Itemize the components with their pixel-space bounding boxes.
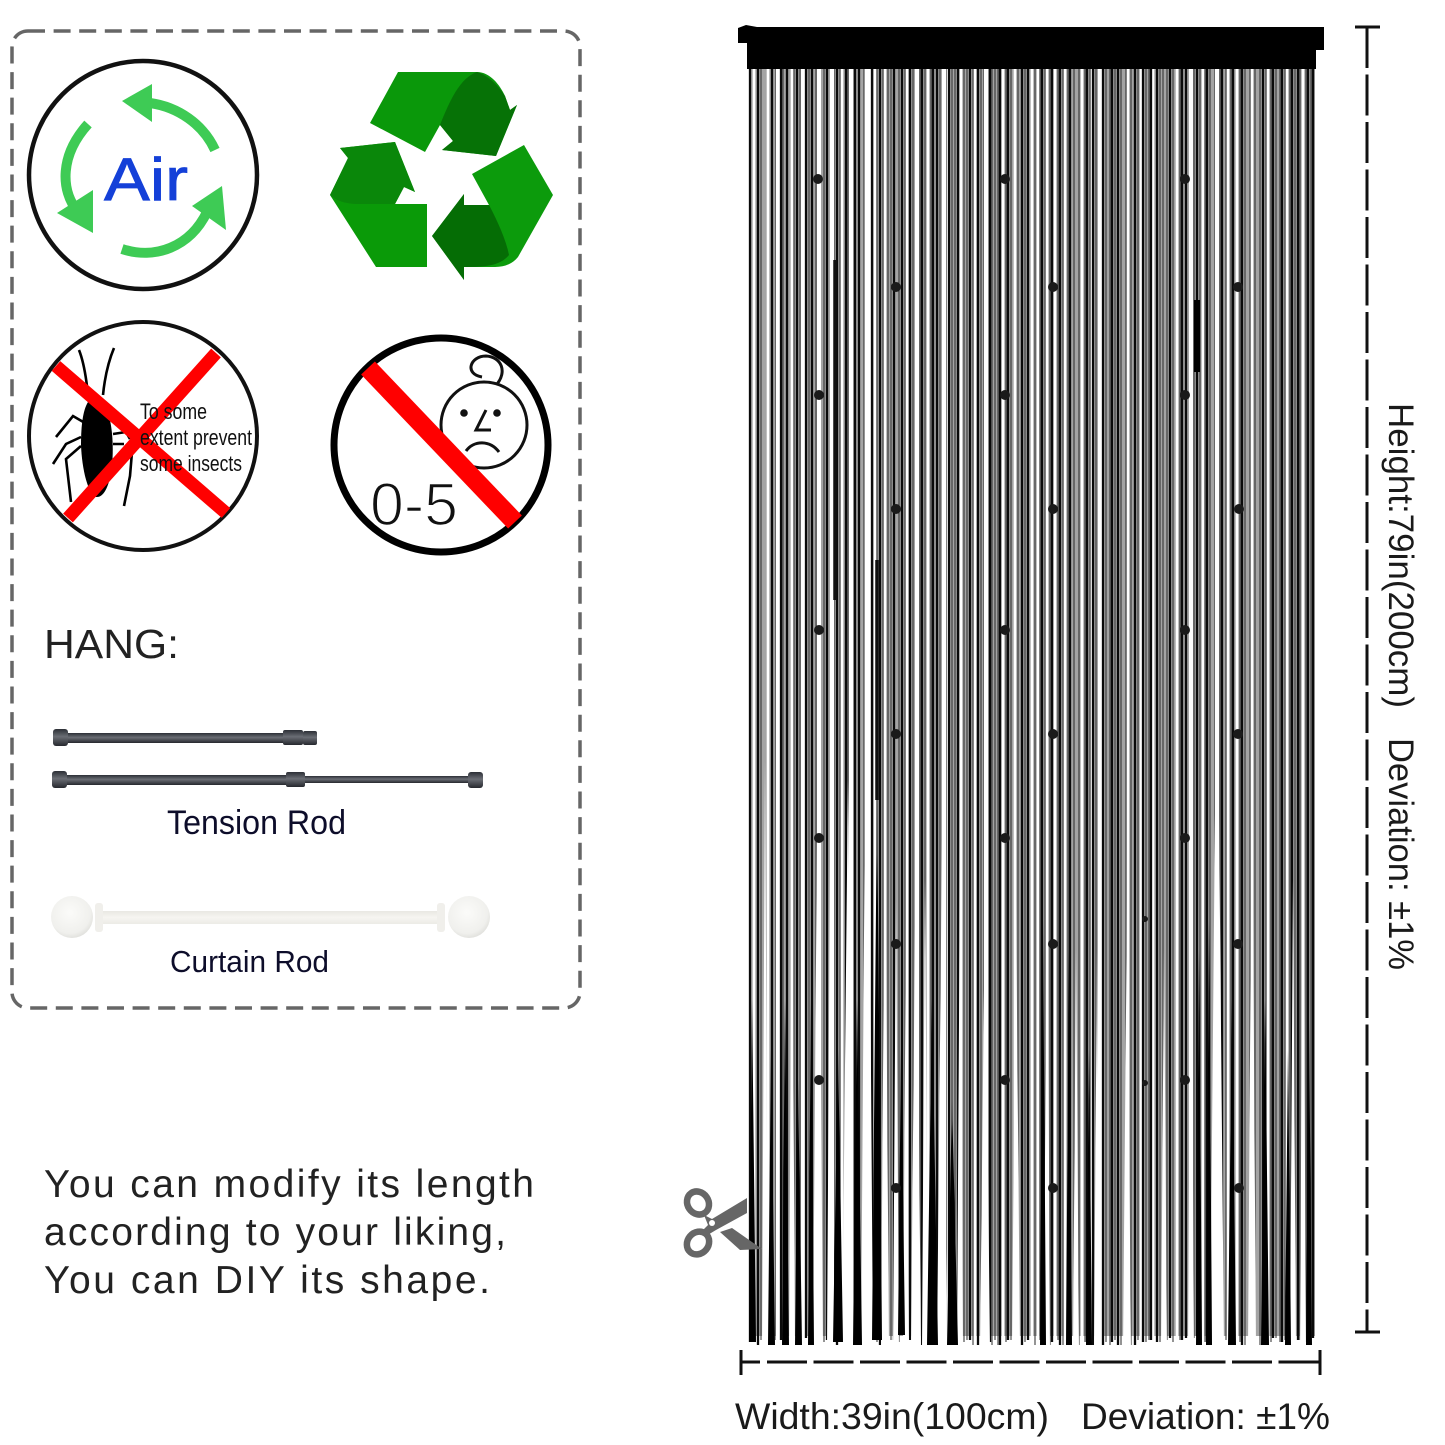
- curtain rod: [51, 896, 490, 938]
- icon: scissors: [682, 1187, 762, 1259]
- icon: not for ages 0-5: [334, 338, 548, 552]
- heading: hang: HANG:: [44, 621, 179, 667]
- string curtain: [738, 25, 1324, 1350]
- text block: modify length: You can modify its length: [44, 1163, 534, 1206]
- label: width and deviation: [735, 1396, 1330, 1437]
- icon: air circulation: [29, 61, 257, 289]
- tension rod, collapsed: [53, 729, 317, 746]
- label: width and deviation: Deviation: ±1%: [1081, 1396, 1330, 1437]
- text block: modify length: You can DIY its shape.: [44, 1259, 490, 1302]
- thin dark strands: [761, 68, 1311, 1345]
- beads on strands: [813, 174, 1244, 1193]
- white gaps, full height: [754, 68, 1303, 1350]
- text block: modify length: [44, 1163, 534, 1302]
- label: width and deviation: Width:39in(100cm): [735, 1396, 1049, 1437]
- label: height and deviation: Deviation: ±1%: [1381, 738, 1420, 970]
- tension rod, extended: [52, 771, 483, 788]
- label: height and deviation: Height:79in(200cm): [1381, 403, 1420, 708]
- label: height and deviation: [1381, 403, 1420, 970]
- icon: insect prevention: To some: [140, 399, 207, 424]
- dimension: height line: [1355, 27, 1380, 1332]
- label: tension rod: Tension Rod: [167, 804, 346, 842]
- dimension: width line: [741, 1350, 1320, 1375]
- panel: features and hanging options: [12, 31, 580, 1008]
- icon: insect prevention: extent prevent: [140, 425, 252, 450]
- black strands: [750, 68, 1313, 1345]
- icon: insect prevention: [29, 322, 257, 550]
- icon: not for ages 0-5: 0-5: [370, 471, 458, 538]
- label: curtain rod: Curtain Rod: [170, 944, 329, 979]
- curtain header band: [738, 25, 1324, 69]
- icon: recycling symbol: [330, 72, 553, 280]
- tapered dark clumps: [749, 800, 1312, 1345]
- tapered gaps where strands clump: [762, 520, 1306, 1350]
- gray strand mass: [749, 68, 1315, 1336]
- icon: air circulation: Air: [104, 146, 188, 213]
- icon: insect prevention: some insects: [140, 451, 242, 476]
- text block: modify length: according to your liking,: [44, 1211, 506, 1254]
